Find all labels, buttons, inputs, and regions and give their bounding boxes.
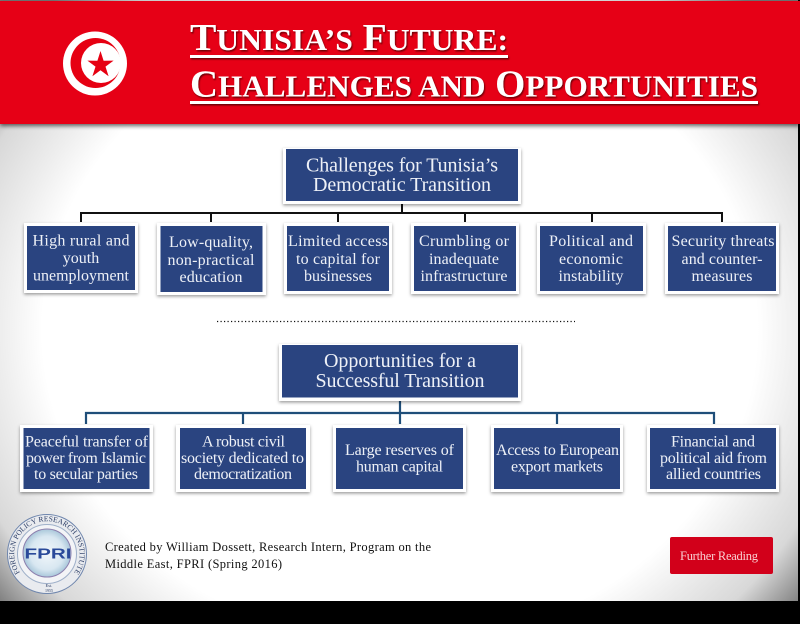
opportunity: civil society: democratization [194,466,292,483]
panel: opportunities heading [279,344,521,401]
opportunity: export markets: Access to European [496,442,619,459]
challenge: unemployment: unemployment [33,268,130,284]
opportunity: financial aid: Financial and [671,434,755,450]
opportunity: human capital: Large reserves of [345,442,455,459]
challenge: unemployment: youth [63,250,99,267]
challenge: education [157,223,266,295]
challenge: instability: instability [558,268,624,285]
opportunity: export markets: export markets [511,458,603,476]
opportunity: peaceful transfer: Peaceful transfer of [25,434,149,450]
challenge: capital: businesses [304,268,372,285]
opportunity: civil society [176,425,310,492]
challenge: education: Low-quality, [169,234,253,251]
connector lines: opportunities [86,400,714,424]
button: further reading [670,537,773,574]
icon: Tunisian flag emblem [63,32,127,96]
challenge: infrastructure: infrastructure [420,268,508,285]
challenge: capital [284,223,392,294]
panel: challenges heading: Democratic Transition [313,174,491,196]
challenge: instability: Political and [549,233,633,250]
credit text [105,540,431,571]
challenge: unemployment [24,223,138,293]
challenge: security [665,223,779,294]
challenge: security: and counter- [682,251,762,268]
challenge: security: measures [692,268,752,285]
icon: FPRI logo seal: FOREIGN POLICY RESEARCH INSTITUTE [9,516,85,576]
challenge: infrastructure [411,223,519,294]
challenge: unemployment: High rural and [32,232,130,250]
challenge: instability [537,223,646,294]
button: further reading: Further Reading [680,549,759,563]
challenge: education: education [180,269,242,286]
opportunity: peaceful transfer: to secular parties [34,466,138,483]
challenge: capital: to capital for [296,251,381,268]
panel: challenges heading: Challenges for Tunisia’s [306,154,498,176]
opportunity: civil society: A robust civil [202,434,286,450]
icon: FPRI logo seal: FPRI [24,546,72,562]
challenge: infrastructure: inadequate [429,251,499,268]
panel: opportunities heading: Opportunities for a [324,350,476,372]
opportunity: peaceful transfer: power from Islamic [26,450,146,467]
credit text: Middle East, FPRI (Spring 2016) [105,557,282,571]
icon: FPRI logo seal: Est. [46,583,52,588]
challenge: education: non-practical [168,252,255,269]
opportunity: human capital [333,425,466,492]
opportunity: human capital: human capital [356,458,444,476]
opportunity: financial aid: allied countries [666,466,761,483]
opportunity: peaceful transfer [20,425,153,492]
opportunity: export markets [491,425,623,492]
connector lines: challenges [81,203,722,222]
panel: opportunities heading: Successful Transition [316,370,484,392]
title: CHALLENGES AND OPPORTUNITIES [190,64,758,106]
panel: challenges heading [283,148,521,204]
title [190,17,758,106]
icon: FPRI logo seal: 1955 [45,588,53,593]
challenge: security: Security threats [672,233,774,250]
credit text: Created by William Dossett, Research Intern, Program on the [105,540,431,554]
opportunity: financial aid [647,425,779,492]
opportunity: civil society: society dedicated to [181,450,304,467]
header banner [0,1,800,124]
challenge: infrastructure: Crumbling or [419,233,510,250]
title: TUNISIA’S FUTURE: [190,17,508,59]
challenge: capital: Limited access [288,233,388,250]
opportunity: financial aid: political aid from [660,450,768,467]
challenge: instability: economic [559,251,623,268]
